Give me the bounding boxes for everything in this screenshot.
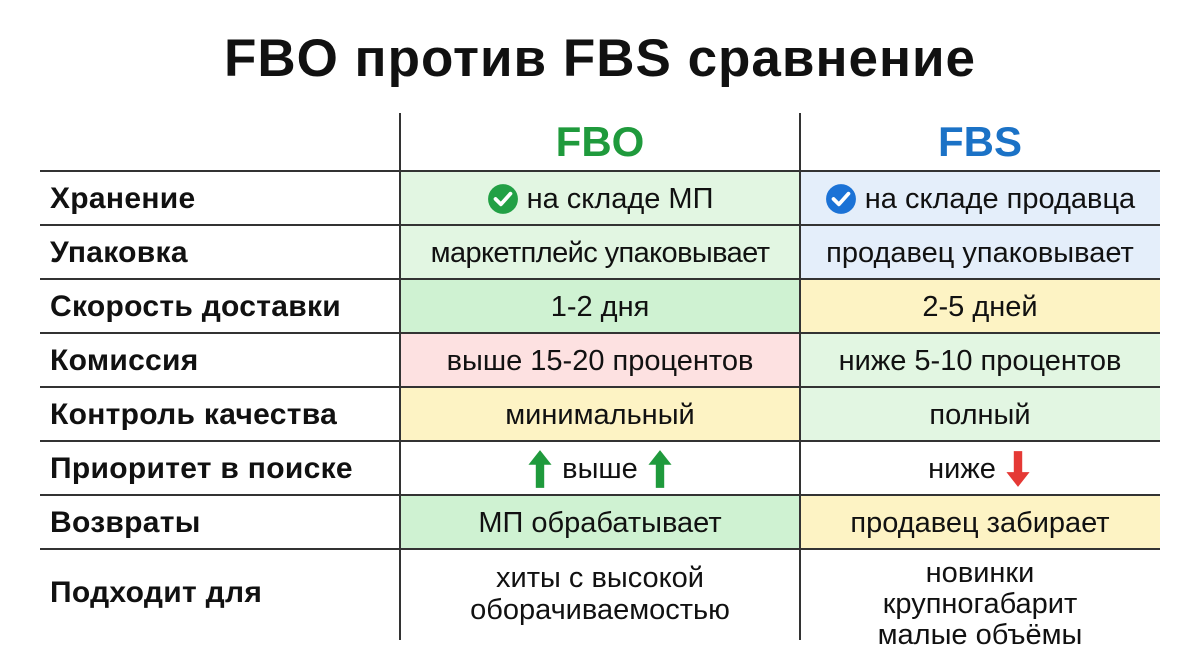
row: storage: Хранение <box>50 182 195 215</box>
row: commission: Комиссия <box>50 344 199 377</box>
row: commission: выше 15-20 процентов <box>447 345 753 377</box>
row: suitable for: новинки <box>926 557 1034 589</box>
row: suitable for: крупногабарит <box>883 588 1077 620</box>
row: search priority: выше <box>562 453 638 485</box>
row: returns: Возвраты <box>50 506 201 539</box>
row: quality control <box>50 388 1160 440</box>
row: suitable for <box>50 557 1082 651</box>
header: FBO: FBO <box>556 118 644 165</box>
row: storage: на складе продавца <box>865 183 1135 215</box>
row: quality control: полный <box>929 399 1031 431</box>
row: returns: МП обрабатывает <box>478 507 722 539</box>
row: search priority: ниже <box>928 453 996 485</box>
row: returns: продавец забирает <box>850 507 1110 539</box>
row: delivery speed: 2-5 дней <box>922 291 1038 323</box>
row: storage <box>50 172 1160 224</box>
row: returns <box>50 496 1160 548</box>
header: FBS: FBS <box>938 118 1022 165</box>
row: delivery speed: Скорость доставки <box>50 290 341 323</box>
row: delivery speed <box>50 280 1160 332</box>
row: storage: на складе МП <box>527 183 713 215</box>
row: search priority <box>50 450 1030 488</box>
row: packing: маркетплейс упаковывает <box>431 237 769 269</box>
row: commission: ниже 5-10 процентов <box>839 345 1121 377</box>
row: packing: продавец упаковывает <box>826 237 1134 269</box>
row: commission <box>50 334 1160 386</box>
row: quality control: минимальный <box>505 399 695 431</box>
row: packing: Упаковка <box>50 236 188 269</box>
row: packing <box>50 226 1160 278</box>
row: quality control: Контроль качества <box>50 398 337 431</box>
row: suitable for: хиты с высокой <box>496 562 704 594</box>
row: suitable for: Подходит для <box>50 576 262 609</box>
row: suitable for: оборачиваемостью <box>470 594 730 626</box>
title: FBO против FBS сравнение <box>224 29 976 88</box>
row: search priority: Приоритет в поиске <box>50 452 353 485</box>
row: delivery speed: 1-2 дня <box>551 291 649 323</box>
row: suitable for: малые объёмы <box>878 619 1082 651</box>
